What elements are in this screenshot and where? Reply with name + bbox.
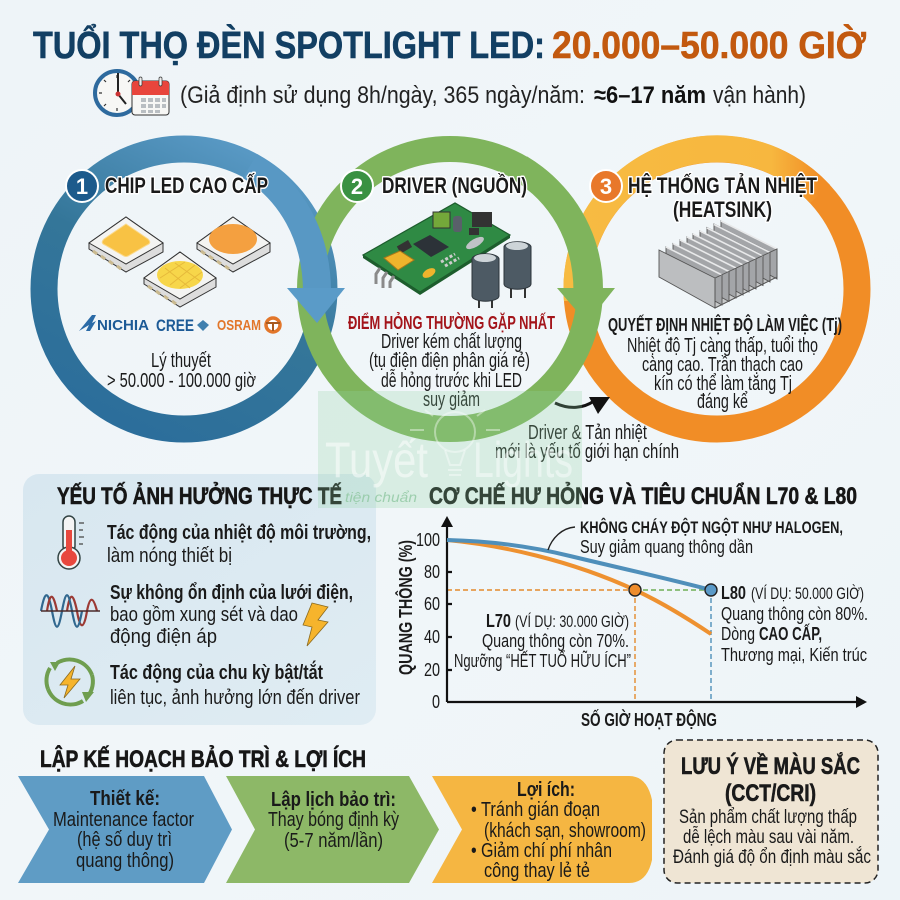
chevron: benefits xyxy=(432,776,652,883)
dot: L80 xyxy=(705,584,717,596)
badge 1 xyxy=(66,170,98,202)
text: lifetime theory xyxy=(107,350,256,392)
subtitle: ≈6–17 năm xyxy=(594,82,706,109)
ring: green full xyxy=(310,149,590,429)
y-axis label: QUANG THÔNG (%) xyxy=(395,540,416,675)
text: heatsink description: đáng kể xyxy=(697,391,748,413)
callout: L70: Ngưỡng “HẾT TUỔ HỮU ÍCH” xyxy=(454,650,631,671)
y-axis ticks: 40 xyxy=(424,627,440,647)
text: grid factor: động điện áp xyxy=(110,626,217,648)
title: TUỔI THỌ ĐÈN SPOTLIGHT LED: xyxy=(33,22,545,67)
dot: L70 xyxy=(629,584,641,596)
callout: L70: L70 xyxy=(486,611,511,631)
ring: green overlap with arrow xyxy=(520,168,615,323)
callout: L70: (VÍ DỤ: 30.000 GIỜ) xyxy=(515,612,629,631)
icon: heatsink xyxy=(659,221,777,308)
chevron: benefits: • Tránh gián đoạn xyxy=(471,799,600,821)
chevron: design: Maintenance factor xyxy=(53,809,194,831)
text: temperature factor xyxy=(107,522,371,567)
panel: color note: Sản phẩm chất lượng thấp xyxy=(679,807,857,828)
y-axis ticks: 80 xyxy=(424,562,440,582)
badge 3 xyxy=(590,170,622,202)
chevron: schedule: Thay bóng định kỳ xyxy=(268,809,399,831)
text: limiting factor note xyxy=(495,422,679,463)
chevron: schedule xyxy=(226,776,439,883)
callout: L70 xyxy=(454,611,631,671)
icon: chip orange circle xyxy=(197,217,270,272)
y-axis ticks: 100 xyxy=(416,530,440,550)
text: temperature factor: làm nóng thiết bị xyxy=(107,545,232,567)
arrow: black curve xyxy=(555,397,610,414)
panel background xyxy=(23,474,376,725)
y-axis ticks: 20 xyxy=(424,660,440,680)
y-axis ticks: 0 xyxy=(432,692,440,712)
text: limiting factor note: mới là yếu tố giới hạn chính xyxy=(495,441,679,463)
title: 20.000–50.000 GIỜ xyxy=(552,23,867,67)
panel: chip LED xyxy=(66,170,280,392)
panel: real-world factors xyxy=(23,474,376,725)
heading: HỆ THỐNG TẢN NHIỆT xyxy=(628,172,817,198)
callout: L80: Thương mại, Kiến trúc xyxy=(721,645,867,665)
icon: chip yellow grid xyxy=(144,252,216,307)
chevron: design: (hệ số duy trì xyxy=(77,829,172,851)
callout: no sudden failure xyxy=(580,518,843,557)
badge 2 xyxy=(341,170,373,202)
chevron: benefits: (khách sạn, showroom) xyxy=(484,820,646,842)
icon: capacitors xyxy=(472,242,531,308)
text: driver description: suy giảm xyxy=(423,389,480,411)
callout: no sudden failure: Suy giảm quang thông dần xyxy=(580,537,753,557)
panel: color note: (CCT/CRI) xyxy=(725,780,816,807)
ring: blue full xyxy=(44,149,324,429)
icon: chip yellow square xyxy=(89,217,163,272)
subtitle: (Giả định sử dụng 8h/ngày, 365 ngày/năm: xyxy=(180,82,585,109)
text: limiting factor note: Driver & Tản nhiệt xyxy=(528,422,647,444)
subtitle: vận hành) xyxy=(713,82,806,109)
chevron: design: Thiết kế: xyxy=(90,788,160,810)
x-axis label: SỐ GIỜ HOẠT ĐỘNG xyxy=(581,709,717,730)
text: heatsink description: kín có thể làm tăng Tj xyxy=(654,373,792,395)
logos xyxy=(79,315,280,335)
callout: L80: CAO CẤP, xyxy=(759,623,822,644)
logos: CREE xyxy=(156,316,194,335)
chevron: schedule: Lập lịch bảo trì: xyxy=(271,789,396,811)
heading: DRIVER (NGUỒN) xyxy=(382,173,527,198)
panel: color note xyxy=(664,740,878,883)
text: heatsink description: càng cao. Trần thạch cao xyxy=(642,354,803,376)
chevron: benefits: công thay lẻ tẻ xyxy=(484,860,590,882)
chevron: design xyxy=(18,776,232,883)
callout: L80 xyxy=(721,583,868,665)
title xyxy=(33,22,867,67)
icon: lightning bolt xyxy=(303,603,328,646)
text: grid factor: bao gồm xung sét và dao xyxy=(110,604,298,626)
text: driver description: Driver kém chất lượng xyxy=(381,331,522,353)
icon: clock and calendar xyxy=(95,71,169,115)
watermark: Tuyết xyxy=(325,432,428,488)
ring: blue overlap with arrow xyxy=(250,166,345,323)
logos: NICHIA xyxy=(97,317,149,334)
badge 2: 2 xyxy=(351,174,363,199)
ring: orange full xyxy=(577,149,857,429)
chevron: benefits: Lợi ích: xyxy=(517,779,575,801)
text: temperature factor: Tác động của nhiệt độ môi trường, xyxy=(107,522,371,544)
icon: circuit board xyxy=(363,203,510,295)
text: driver description: (tụ điện điện phân giá rẻ) xyxy=(369,350,530,372)
text: driver description: dễ hỏng trước khi LED xyxy=(381,369,522,392)
text: grid factor xyxy=(110,582,353,648)
text: heatsink description xyxy=(627,335,818,413)
icon: thermometer xyxy=(58,516,84,569)
heading: (HEATSINK) xyxy=(673,197,772,222)
y-axis ticks xyxy=(416,530,440,712)
panel: heatsink xyxy=(590,170,842,413)
text: on/off factor: Tác động của chu kỳ bật/tắt xyxy=(110,660,323,684)
axes xyxy=(441,516,867,708)
chevron: schedule: (5-7 năm/lần) xyxy=(284,830,383,852)
heading xyxy=(628,172,817,222)
text: on/off factor: liên tục, ảnh hưởng lớn đến driver xyxy=(110,687,360,709)
badge 3: 3 xyxy=(600,174,612,199)
text: lifetime theory: > 50.000 - 100.000 giờ xyxy=(107,370,256,392)
text: lifetime theory: Lý thuyết xyxy=(151,350,211,372)
text: driver description xyxy=(369,331,530,411)
icon: on/off cycle xyxy=(46,659,94,705)
blue curve xyxy=(447,540,711,590)
badge 1: 1 xyxy=(76,174,88,199)
text: on/off factor xyxy=(110,660,360,709)
line chart: lumen depreciation xyxy=(395,516,868,730)
panel: driver xyxy=(341,170,555,411)
watermark: Lights xyxy=(473,432,573,488)
watermark: tiện chuẩn xyxy=(345,489,417,505)
chevron: design: quang thông) xyxy=(76,850,174,872)
maintenance heading: LẬP KẾ HOẠCH BẢO TRÌ & LỢI ÍCH xyxy=(40,744,366,773)
icon: AC wave xyxy=(41,595,100,627)
text: common failure: ĐIỂM HỎNG THƯỜNG GẶP NHẤT xyxy=(348,312,555,333)
text: heatsink description: Nhiệt độ Tj càng thấp, tuổi thọ xyxy=(627,335,818,357)
heading: YẾU TỐ ẢNH HƯỞNG THỰC TẾ xyxy=(57,481,342,510)
watermark xyxy=(318,391,582,508)
panel: color note: dễ lệch màu sau vài năm. xyxy=(683,826,854,848)
guide lines xyxy=(447,590,711,702)
logos: OSRAM xyxy=(217,317,261,334)
text: grid factor: Sự không ổn định của lưới điện, xyxy=(110,582,353,604)
heading: CHIP LED CAO CẤP xyxy=(105,173,268,198)
callout: L80: Dòng xyxy=(721,624,755,644)
leader line xyxy=(548,527,575,550)
orange curve xyxy=(447,540,711,634)
callout: L80: L80 xyxy=(721,583,746,603)
chevron: benefits: • Giảm chí phí nhân xyxy=(471,840,612,862)
callout: L80: Quang thông còn 80%. xyxy=(721,604,868,624)
y-axis ticks: 60 xyxy=(424,594,440,614)
callout: L70: Quang thông còn 70%. xyxy=(482,631,629,651)
